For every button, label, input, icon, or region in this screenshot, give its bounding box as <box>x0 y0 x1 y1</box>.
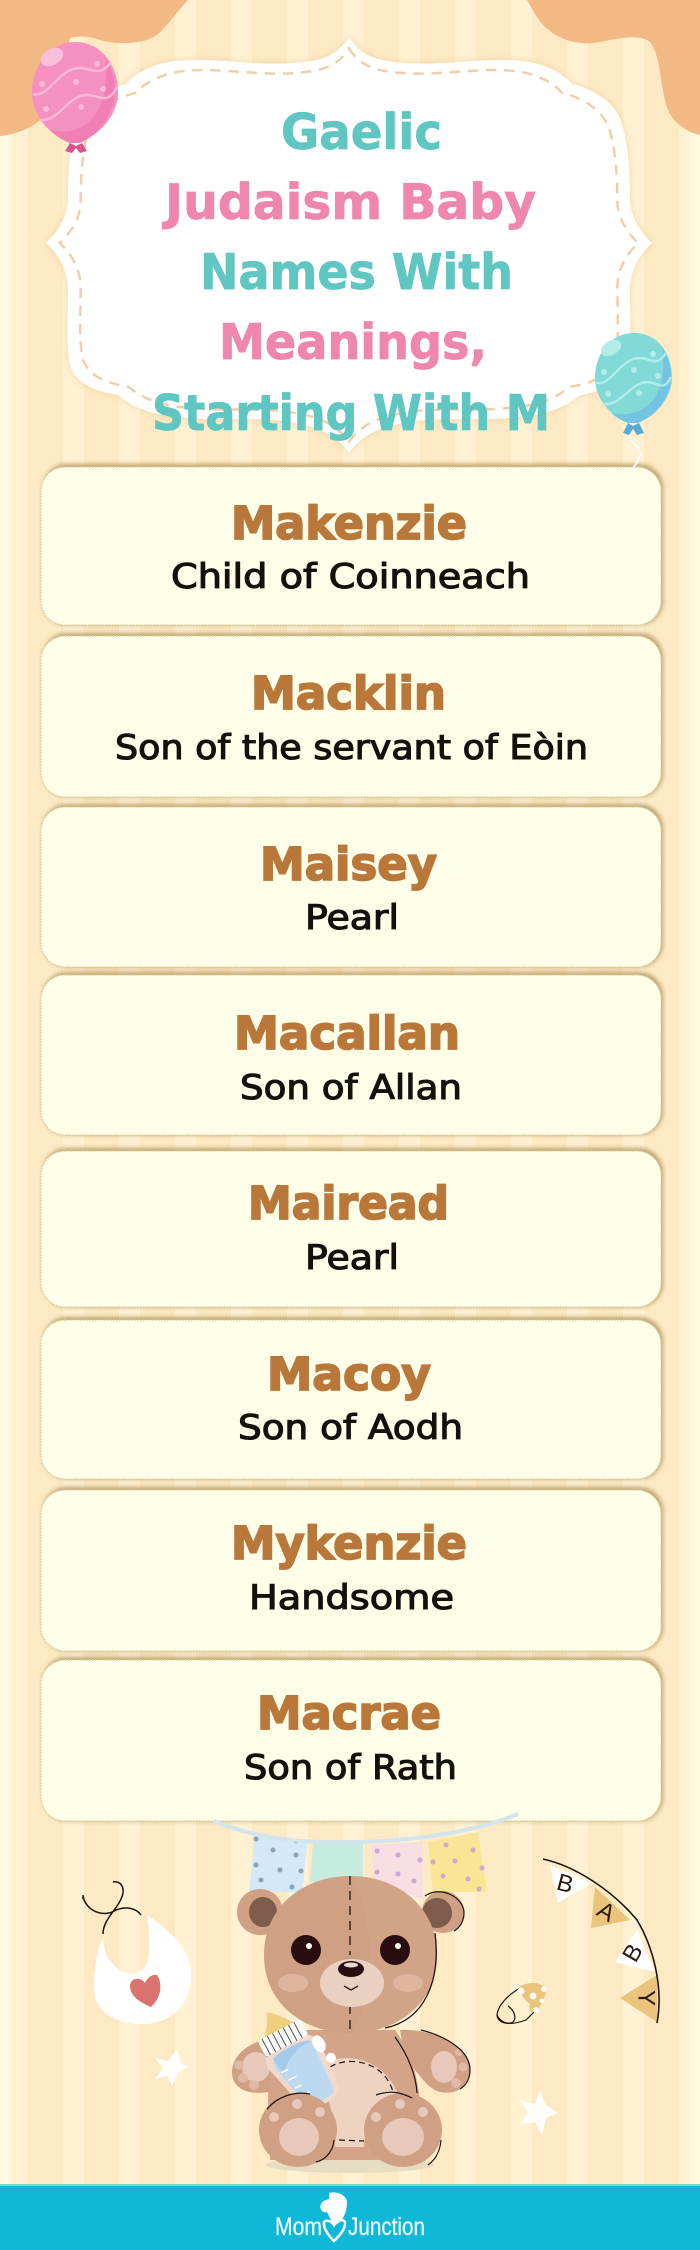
nose <box>338 1961 364 1977</box>
footer band: Junction <box>348 2213 425 2241</box>
card 6 <box>41 1317 663 1479</box>
name: Mykenzie <box>231 1517 467 1570</box>
blue flag <box>249 1835 308 1892</box>
stitch <box>349 1876 351 2033</box>
icon: blue balloon <box>595 333 672 470</box>
pink flag <box>372 1842 423 1900</box>
left ear <box>237 1889 283 1935</box>
meaning: Child of Coinneach <box>171 557 530 597</box>
footer band <box>0 2184 700 2250</box>
heart <box>130 1975 160 2007</box>
right arm <box>400 2030 470 2093</box>
tummy patch <box>318 2058 398 2147</box>
mouth <box>344 1986 358 1990</box>
meaning: Handsome <box>249 1578 454 1618</box>
meaning: Son of the servant of Eòin <box>115 728 588 768</box>
logo text: Mom <box>275 2213 322 2241</box>
baby bottle <box>245 1994 353 2119</box>
meaning: Son of Rath <box>244 1748 457 1788</box>
title: Judaism Baby <box>162 174 536 231</box>
card 5 <box>41 1148 663 1307</box>
name: Makenzie <box>231 497 467 550</box>
title: Gaelic <box>281 104 442 161</box>
title: Meanings, <box>219 314 487 371</box>
name: Macklin <box>251 667 446 720</box>
card 4 <box>41 972 663 1135</box>
mint flag <box>310 1843 363 1882</box>
strings <box>83 1882 141 1934</box>
bunting <box>214 1814 518 1900</box>
name: Maisey <box>260 838 437 891</box>
baby pennant: B <box>617 1939 649 1967</box>
card 2 <box>41 633 663 797</box>
meaning: Pearl <box>305 1238 399 1278</box>
name: Macoy <box>267 1348 431 1401</box>
icon: pink balloon <box>32 42 118 153</box>
right foot <box>364 2092 442 2167</box>
card 8 <box>41 1657 663 1821</box>
string <box>214 1814 518 1842</box>
body <box>268 2030 420 2160</box>
left arm <box>232 2039 295 2093</box>
title plaque <box>46 37 652 453</box>
left foot <box>259 2093 337 2167</box>
yellow flag <box>428 1832 487 1892</box>
logo: mother and child icon <box>320 2192 347 2241</box>
name: Macrae <box>257 1687 441 1740</box>
teddy bear <box>232 1876 470 2173</box>
baby pennant <box>543 1859 660 2023</box>
name: Macallan <box>234 1007 460 1060</box>
muzzle <box>320 1959 384 2007</box>
shadow <box>266 2157 434 2173</box>
card 7 <box>41 1487 663 1651</box>
baby pennant: B <box>554 1869 576 1899</box>
name: Mairead <box>248 1177 449 1230</box>
eyes <box>291 1935 321 1965</box>
icon: bib <box>83 1882 191 2024</box>
title: Names With <box>200 244 513 301</box>
baby pennant: Y <box>632 1990 660 2006</box>
head <box>264 1876 437 2033</box>
icon: safety pin <box>497 1983 547 2023</box>
baby pennant: A <box>592 1896 620 1928</box>
icon: star right <box>520 2090 558 2135</box>
meaning: Son of Allan <box>240 1068 462 1108</box>
title: Starting With M <box>152 385 550 442</box>
right ear <box>422 1891 464 1933</box>
meaning: Son of Aodh <box>238 1408 463 1448</box>
icon: star left <box>155 2049 187 2086</box>
cheeks <box>278 1974 308 1992</box>
title <box>152 104 550 442</box>
orange drip top left <box>0 0 188 136</box>
card 1 <box>41 464 663 625</box>
head outline <box>385 1933 436 2028</box>
orange drip top right <box>527 0 700 135</box>
card 3 <box>41 804 663 967</box>
meaning: Pearl <box>305 898 399 938</box>
